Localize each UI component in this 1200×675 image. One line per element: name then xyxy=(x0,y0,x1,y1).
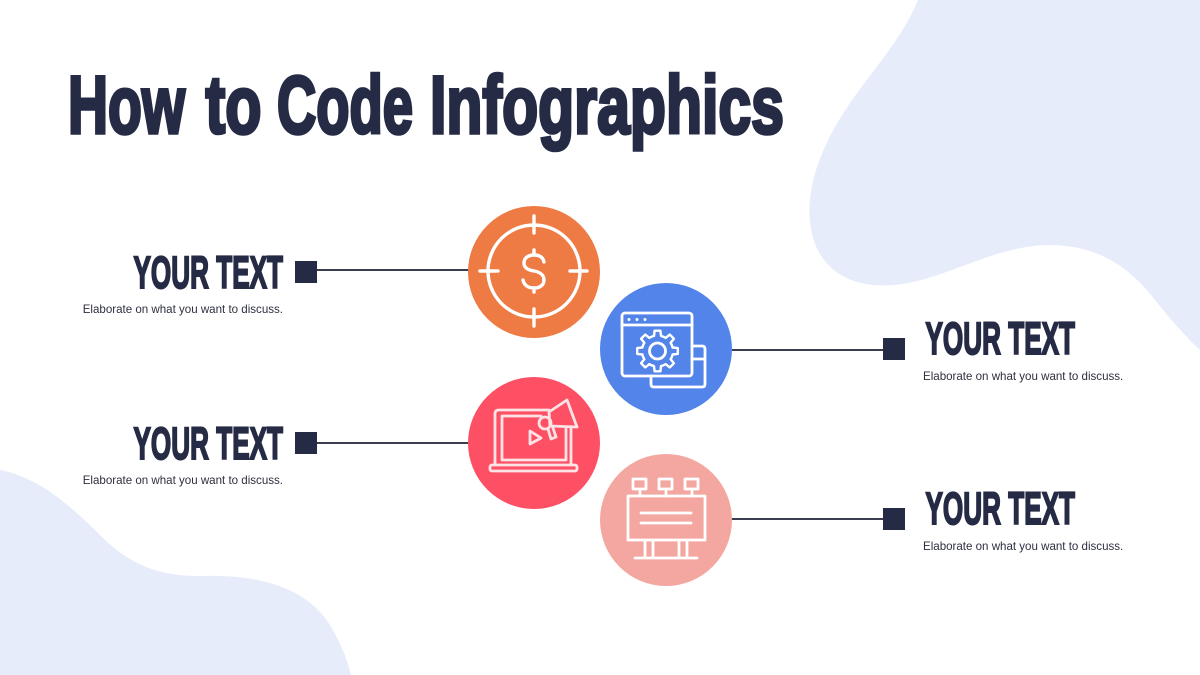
item 1: top left label xyxy=(83,247,469,316)
connector marker xyxy=(883,338,905,360)
heading: YOUR TEXT xyxy=(926,483,1075,534)
connector line xyxy=(732,349,884,351)
gear teeth xyxy=(637,331,678,371)
item 4: lower right label xyxy=(732,483,1123,553)
title: Code xyxy=(277,60,413,151)
connector marker xyxy=(883,508,905,530)
connector marker xyxy=(295,261,317,283)
browser dots xyxy=(628,318,646,321)
item 2: lower left label xyxy=(83,418,469,487)
title: How xyxy=(68,60,185,151)
description: Elaborate on what you want to discuss. xyxy=(83,304,283,316)
background blob: top right xyxy=(809,0,1200,350)
icon: red circle with laptop and megaphone xyxy=(468,377,600,509)
connector line xyxy=(732,518,884,520)
description: Elaborate on what you want to discuss. xyxy=(923,371,1123,383)
title: to xyxy=(206,60,262,151)
heading: YOUR TEXT xyxy=(134,418,283,469)
item 3: upper right label xyxy=(732,313,1123,383)
description: Elaborate on what you want to discuss. xyxy=(83,475,283,487)
icon: orange circle with dollar target xyxy=(468,206,600,338)
connector marker xyxy=(295,432,317,454)
background blob: bottom left xyxy=(0,470,351,675)
icon: pink circle with billboard xyxy=(600,454,732,586)
description: Elaborate on what you want to discuss. xyxy=(923,541,1123,553)
icon: blue circle with browser gear xyxy=(600,283,732,415)
connector line xyxy=(317,442,469,444)
connector line xyxy=(317,269,469,271)
title xyxy=(68,60,784,151)
heading: YOUR TEXT xyxy=(134,247,283,298)
heading: YOUR TEXT xyxy=(926,313,1075,364)
title: Infographics xyxy=(430,60,784,151)
